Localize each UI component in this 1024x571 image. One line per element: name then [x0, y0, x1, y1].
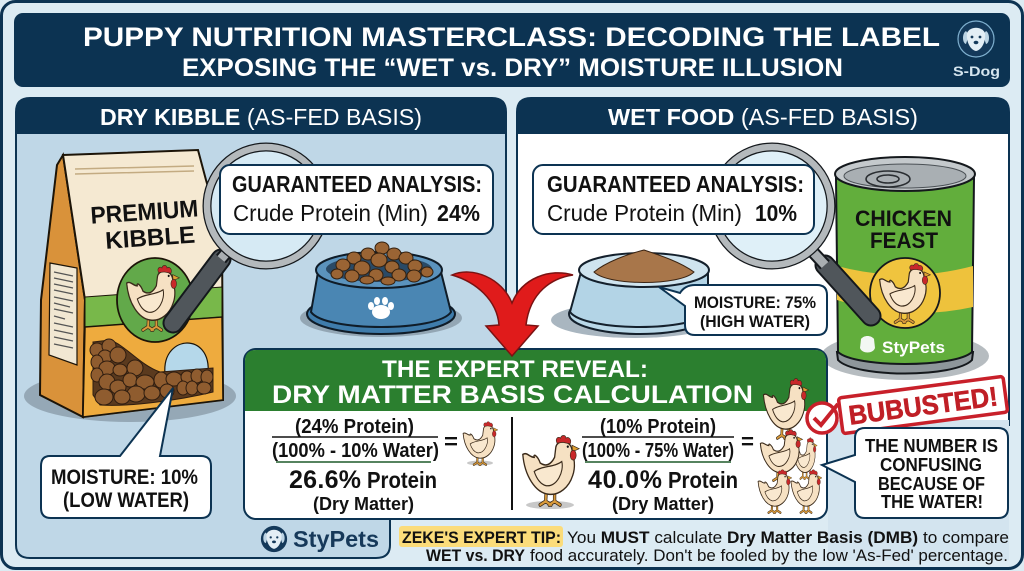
- illustration: chicken feast can: [821, 157, 989, 380]
- formula: wet food: =: [741, 429, 754, 454]
- arrow: red merge arrow: [452, 272, 573, 356]
- callout: guaranteed analysis 10%: [533, 165, 814, 234]
- panel: dry kibble: [16, 98, 506, 558]
- icon: large chicken: [523, 435, 579, 509]
- formula: dry kibble: Protein: [367, 467, 437, 493]
- can name: CHICKEN: [855, 206, 952, 231]
- panel: expert reveal: [244, 349, 827, 519]
- formula: dry kibble: (100% - 10% Water): [272, 440, 439, 462]
- illustration: dry kibble bowl: [300, 242, 462, 337]
- callout: the number is confusing: THE WATER!: [881, 492, 983, 512]
- formula: wet food: (Dry Matter): [612, 494, 714, 514]
- main title: PUPPY NUTRITION MASTERCLASS: DECODING THE LABEL: [83, 22, 940, 52]
- callout: moisture 10%: (LOW WATER): [63, 489, 189, 512]
- callout: the number is confusing: THE NUMBER IS: [865, 436, 998, 456]
- icon: stack of five chickens: [758, 379, 822, 513]
- formula: wet food: [582, 416, 754, 514]
- divider: [511, 417, 513, 510]
- icon: magnifying glass right: [713, 147, 871, 316]
- bag name: PREMIUM: [90, 195, 199, 230]
- title banner: [14, 13, 1010, 87]
- formula: dry kibble: 26.6%: [289, 466, 361, 494]
- formula: dry kibble: [272, 416, 458, 514]
- reveal header: [245, 350, 826, 411]
- callout: the number is confusing: [822, 428, 1008, 518]
- callout: the number is confusing: CONFUSING: [880, 455, 982, 475]
- wet food: [594, 250, 694, 282]
- bowl kibble: [331, 242, 433, 285]
- lower right background: [828, 420, 1009, 560]
- tip text: You MUST calculate Dry Matter Basis (DMB) to compare: [567, 528, 1009, 547]
- callout: guaranteed analysis 24%: Crude Protein (Min): [233, 200, 428, 226]
- bag window: [165, 343, 208, 374]
- bag name: KIBBLE: [104, 222, 196, 255]
- callout: guaranteed analysis 10%: 10%: [755, 200, 797, 226]
- icon: small chicken: [463, 422, 498, 466]
- bag nutrition label: [49, 263, 77, 365]
- can pull tab: [866, 171, 910, 187]
- can chicken badge: [870, 258, 940, 328]
- callout: guaranteed analysis 24%: [220, 165, 493, 234]
- formula: wet food: Protein: [668, 467, 738, 493]
- illustration: wet food bowl: [551, 250, 719, 338]
- tip highlight: [399, 526, 563, 547]
- tip text: WET vs. DRY: [426, 546, 526, 565]
- formula: dry kibble: (24% Protein): [295, 416, 414, 438]
- logo: StyPets: StyPets: [293, 526, 379, 552]
- icon: S-Dog logo: S-Dog: [953, 63, 1000, 79]
- callout: guaranteed analysis 10%: GUARANTEED ANALYSIS:: [547, 171, 804, 197]
- tip text: food accurately. Don't be fooled by the low 'As-Fed' percentage.: [530, 546, 1008, 565]
- callout: moisture 75%: [659, 285, 827, 335]
- callout: moisture 75%: (HIGH WATER): [700, 312, 810, 331]
- tip text: [399, 526, 1009, 565]
- bag chicken badge: [117, 258, 193, 342]
- formula: wet food: 40.0%: [588, 466, 662, 494]
- icon: paw: [368, 297, 394, 319]
- callout: moisture 10%: [41, 388, 211, 518]
- formula: dry kibble: (Dry Matter): [313, 494, 414, 514]
- icon: S-Dog logo: [953, 21, 1000, 79]
- tip text: ZEKE'S EXPERT TIP:: [402, 528, 561, 547]
- heading: dry matter basis calculation: DRY MATTER BASIS CALCULATION: [272, 381, 753, 409]
- heading: wet food: WET FOOD (AS-FED BASIS): [608, 104, 918, 130]
- panel header bar: [517, 98, 1009, 134]
- callout: moisture 75%: MOISTURE: 75%: [694, 293, 816, 312]
- panel: wet food: [517, 98, 1009, 425]
- formula: wet food: (100% - 75% Water): [582, 440, 734, 462]
- bag kibble: [90, 339, 213, 405]
- subtitle: EXPOSING THE “WET vs. DRY” MOISTURE ILLUSION: [182, 54, 843, 82]
- can StyPets logo: StyPets: [882, 338, 945, 357]
- formula: dry kibble: =: [444, 429, 458, 454]
- heading: the expert reveal: THE EXPERT REVEAL:: [382, 356, 648, 383]
- callout: guaranteed analysis 10%: Crude Protein (Min): [547, 200, 742, 226]
- panel header bar: [16, 98, 506, 134]
- formula: wet food: (10% Protein): [600, 416, 716, 438]
- bag front: [63, 150, 223, 417]
- callout: moisture 10%: MOISTURE: 10%: [51, 466, 198, 489]
- illustration: chicken feast can: FEAST: [870, 228, 939, 253]
- callout: the number is confusing: BECAUSE OF: [878, 474, 985, 494]
- illustration: kibble bag: [24, 150, 236, 422]
- heading: dry kibble: DRY KIBBLE (AS-FED BASIS): [100, 104, 422, 130]
- stamp: bubusted: BUBUSTED!: [847, 381, 999, 431]
- callout: guaranteed analysis 24%: GUARANTEED ANALYSIS:: [232, 171, 482, 197]
- can StyPets logo: [860, 336, 945, 357]
- callout: guaranteed analysis 24%: 24%: [437, 200, 480, 226]
- bag name: [90, 195, 201, 256]
- icon: magnifying glass left: [173, 147, 325, 323]
- icon: red check badge: [807, 403, 838, 433]
- bag side gusset: [40, 155, 85, 417]
